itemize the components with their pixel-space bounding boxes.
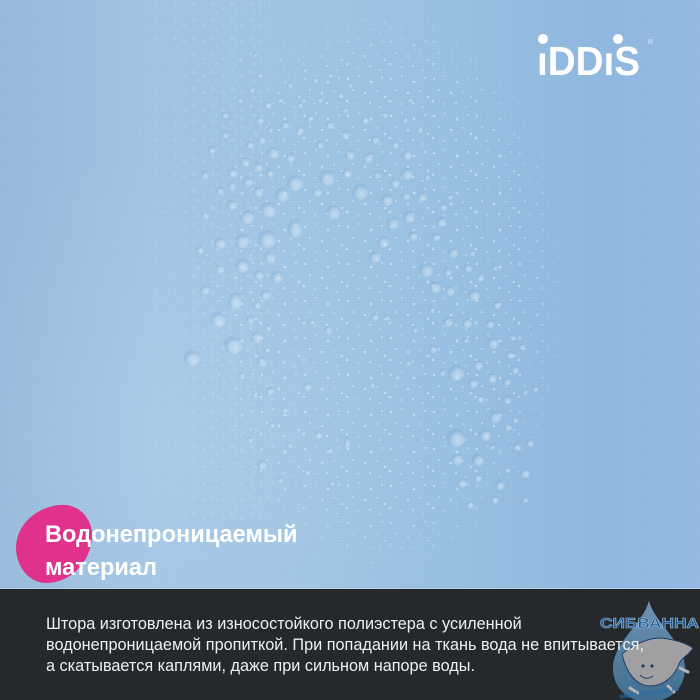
faint bubbles field	[203, 5, 270, 197]
description text: водонепроницаемой пропиткой. При попадании на ткань вода не впитывается,	[46, 636, 644, 654]
logo: IDDIS: ®	[648, 38, 654, 46]
watermark drop	[613, 600, 685, 700]
watermark tub	[622, 638, 693, 693]
logo: IDDIS: ıDDıS	[537, 38, 640, 84]
heading	[45, 522, 298, 580]
watermark name: СИБВАННА	[600, 615, 699, 632]
large droplets	[184, 52, 538, 509]
heading: материал	[45, 554, 157, 580]
heading: Водонепроницаемый	[45, 522, 298, 548]
description text	[46, 614, 644, 674]
small droplets field	[200, 8, 564, 564]
water droplets on fabric	[177, 3, 568, 574]
bottom dark band	[0, 588, 700, 700]
description text: Штора изготовлена из износостойкого полиэстера с усиленной	[46, 614, 522, 632]
description text: а скатывается каплями, даже при сильном напоре воды.	[46, 656, 475, 674]
